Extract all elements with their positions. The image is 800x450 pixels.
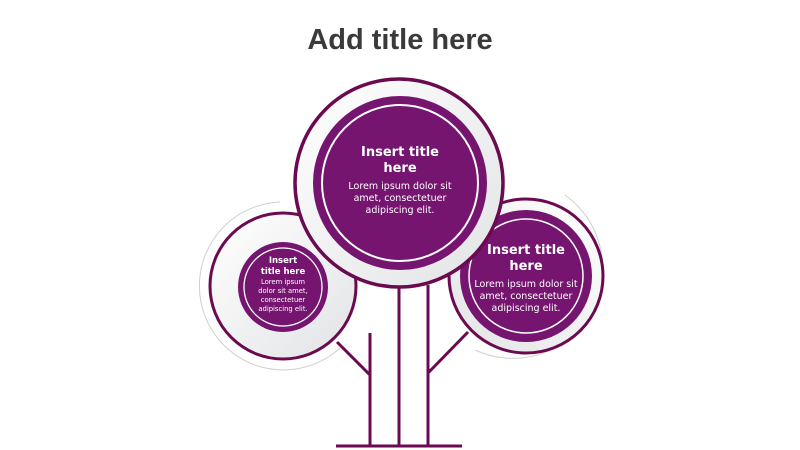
text: right: Lorem ipsum dolor sit <box>474 279 578 290</box>
text: right: here <box>509 259 543 274</box>
title: Add title here <box>307 24 493 56</box>
text: left: consectetuer <box>261 296 305 304</box>
text: center: Insert title <box>361 145 439 160</box>
text: center: amet, consectetuer <box>354 193 446 204</box>
center circle <box>295 79 503 287</box>
text: right <box>474 243 578 314</box>
text: left <box>258 256 308 313</box>
text: center: adipiscing elit. <box>366 205 434 216</box>
text: left: Insert <box>269 256 297 266</box>
text: left: adipiscing elit. <box>258 305 308 313</box>
text: center: Lorem ipsum dolor sit <box>348 181 452 192</box>
text: left: Lorem ipsum <box>261 278 305 286</box>
text: right: adipiscing elit. <box>492 303 560 314</box>
text: right: Insert title <box>487 243 565 258</box>
text: left: title here <box>261 266 305 276</box>
text: center: here <box>383 161 417 176</box>
text: right: amet, consectetuer <box>480 291 572 302</box>
right circle <box>449 195 603 358</box>
text: center <box>348 145 452 216</box>
left circle <box>199 202 356 370</box>
trunk and branches <box>336 285 468 446</box>
text: left: dolor sit amet, <box>258 287 308 295</box>
